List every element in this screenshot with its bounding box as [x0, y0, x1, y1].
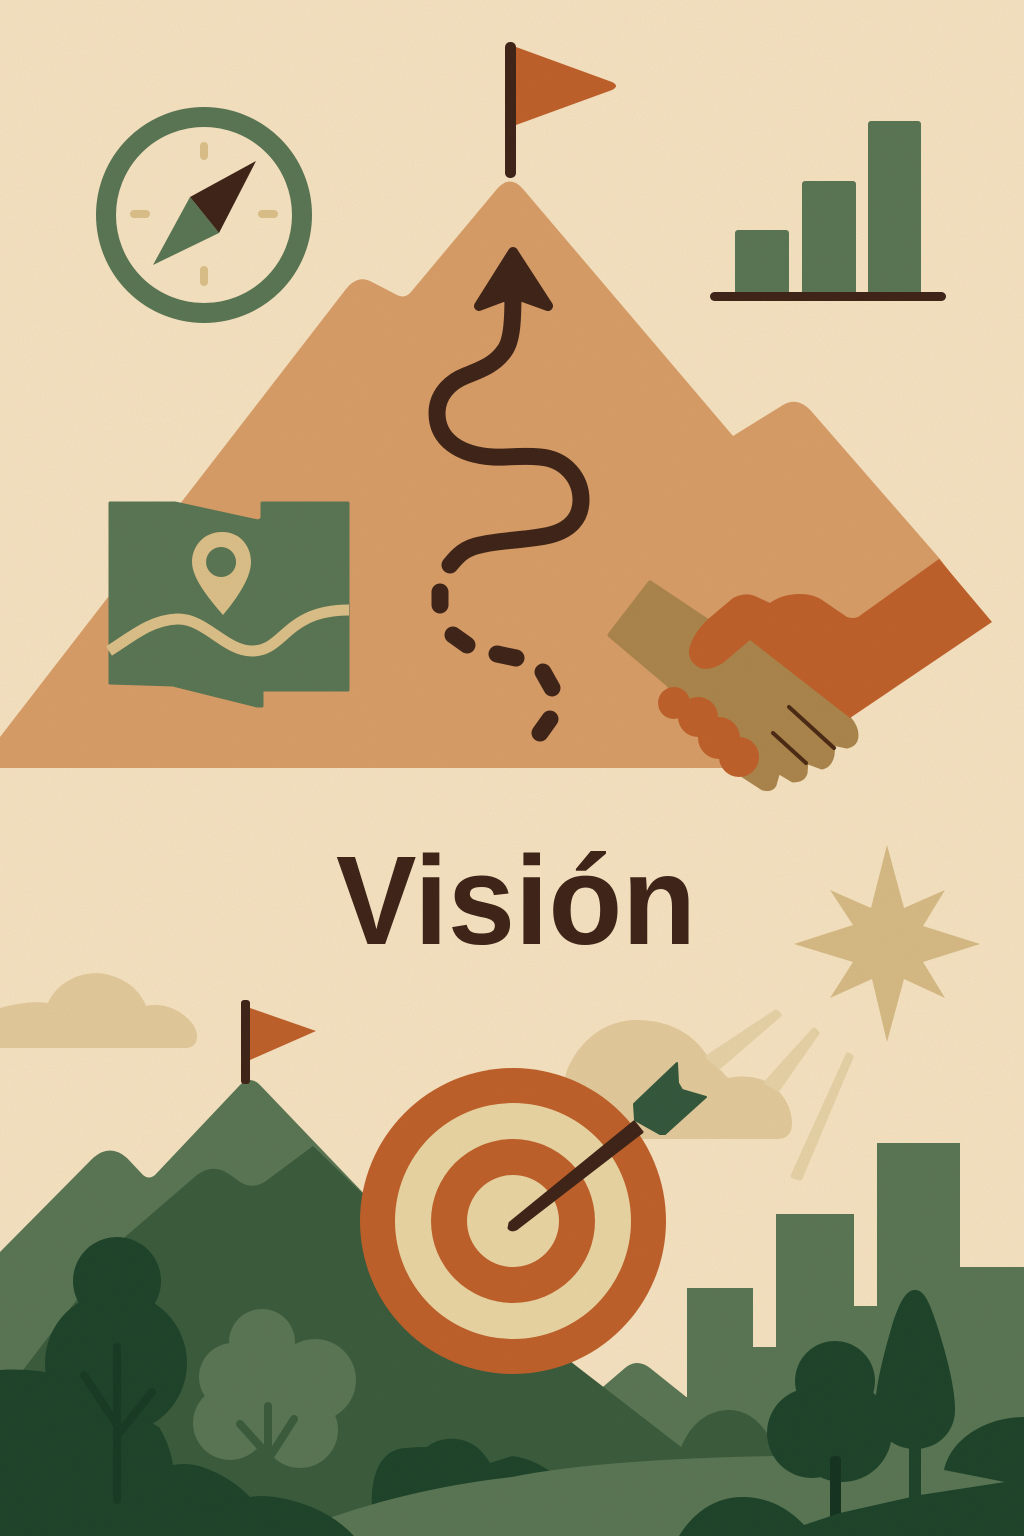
- tree: light green round: [193, 1309, 356, 1505]
- tan forearm and hand: [610, 583, 856, 789]
- solid path: [437, 293, 581, 565]
- map pin: [192, 532, 251, 615]
- cloud left: [0, 973, 197, 1048]
- sun rays: [708, 1012, 851, 1178]
- ray 2: [767, 1030, 817, 1089]
- flag pennant: [516, 47, 616, 125]
- green mountain: back range: [0, 1080, 370, 1420]
- arrow head: [479, 252, 548, 306]
- ray 3: [793, 1055, 851, 1178]
- small mountain behind target right: [590, 1363, 690, 1460]
- right bush: [944, 1417, 1024, 1482]
- target with arrow: [360, 1063, 706, 1374]
- dashed path: [440, 592, 552, 733]
- tree crown: [875, 1290, 955, 1449]
- tree crown: [767, 1341, 892, 1482]
- tree trunk and branches: [240, 1406, 294, 1505]
- flag on mountain summit: [505, 42, 616, 178]
- icon: handshake: [610, 559, 992, 789]
- map river: [109, 610, 349, 651]
- compass tick marks: [134, 146, 274, 282]
- target rings: [360, 1068, 666, 1374]
- tree trunk: [830, 1456, 841, 1524]
- bush medium right: [677, 1410, 778, 1460]
- bar 1: [735, 230, 789, 296]
- title: Visión: [336, 830, 696, 971]
- city skyline: [640, 1143, 1024, 1500]
- arrow shaft: [509, 1122, 642, 1230]
- small flag on green summit: [241, 1000, 316, 1084]
- icon: eight-point star: [794, 845, 980, 1042]
- orange arm and hand: [689, 559, 992, 718]
- bar 2: [802, 181, 856, 296]
- bar chart: [710, 121, 946, 301]
- mountain: main tan peak: [0, 182, 985, 768]
- meadow hill: [330, 1456, 1024, 1536]
- small flag pennant: [250, 1008, 316, 1060]
- small flag pole: [241, 1000, 250, 1084]
- compass needle dark half: [190, 161, 256, 233]
- left foreground hill: [0, 1370, 354, 1536]
- foreground slope: [679, 1478, 1024, 1536]
- tree: round dark right: [767, 1341, 892, 1524]
- tree: large dark left: [0, 1237, 354, 1536]
- tree: tall cypress: [875, 1290, 955, 1505]
- bar 3: [868, 121, 921, 296]
- green mountain: dark front range: [0, 1146, 685, 1536]
- orange fingers: [658, 687, 759, 777]
- map sheet: [110, 503, 348, 706]
- compass ring: [106, 117, 302, 313]
- tree crown: [193, 1309, 356, 1468]
- tree trunk: [909, 1445, 921, 1505]
- arrow: winding trail up the mountain: [437, 252, 581, 733]
- flag pole: [505, 42, 516, 178]
- arrow fletching: [634, 1063, 706, 1134]
- bushes on dark mountain: [372, 1439, 550, 1510]
- icon: compass: [106, 117, 302, 313]
- finger separation lines: [773, 707, 834, 763]
- ray 1: [708, 1012, 779, 1066]
- chart baseline: [710, 292, 946, 301]
- tree crown: [73, 1237, 161, 1325]
- foreground hill with bush: [679, 1417, 1024, 1536]
- tree trunk and branches: [84, 1347, 152, 1500]
- cloud behind target: [560, 1020, 792, 1139]
- icon: folded map with pin: [109, 503, 349, 706]
- compass needle green half: [153, 197, 219, 265]
